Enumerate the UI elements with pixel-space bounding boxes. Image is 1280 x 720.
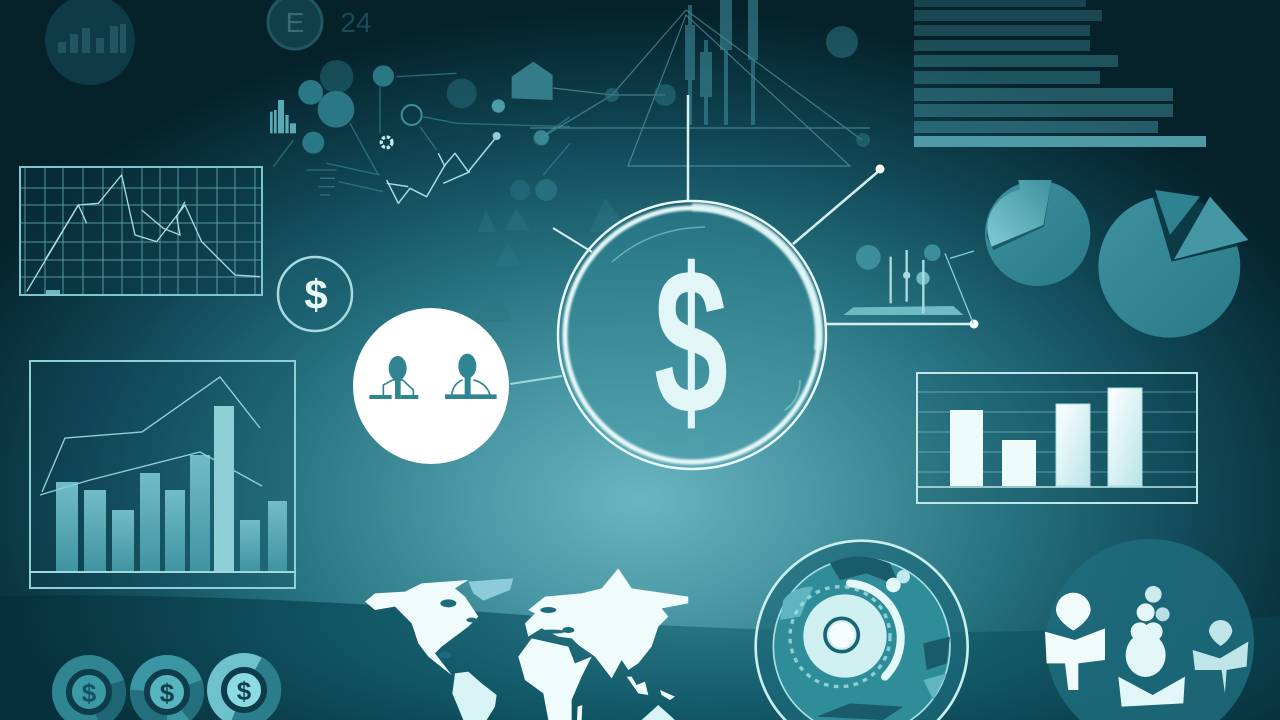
pie chart small xyxy=(985,180,1090,286)
icon: faint coin badge: E xyxy=(286,7,304,38)
coin 1 xyxy=(52,655,126,720)
small candlestick triangle chart xyxy=(843,244,974,323)
faint envelope xyxy=(512,62,553,100)
coin 1: $ xyxy=(82,678,97,708)
horizontal bars: top right xyxy=(914,0,1206,147)
icon: person right xyxy=(445,354,497,399)
white bar chart right xyxy=(917,373,1197,503)
jagged line xyxy=(387,137,497,203)
connector end points xyxy=(876,164,978,328)
faint far nodes xyxy=(533,26,870,201)
bar chart left xyxy=(30,361,295,588)
coins bottom left xyxy=(52,653,281,720)
globe target xyxy=(756,541,968,720)
icon: faint bar badge xyxy=(45,0,135,85)
icon: figure right xyxy=(1193,620,1248,693)
line chart panel xyxy=(20,167,262,295)
people badge bottom right xyxy=(1045,539,1254,720)
map: continents xyxy=(365,568,688,720)
faint network and jagged line xyxy=(270,60,570,203)
icon: figure left xyxy=(1045,593,1105,690)
grid lines xyxy=(20,167,262,295)
connector lines to main coin xyxy=(510,95,974,384)
chart lines xyxy=(27,175,260,292)
coin 2 xyxy=(130,655,204,720)
faint large web xyxy=(530,10,870,166)
faint top decoration xyxy=(45,0,870,203)
coin 3 xyxy=(207,653,281,720)
coin 3: $ xyxy=(237,676,252,706)
icon: figure centre xyxy=(1118,586,1185,707)
bottom dark wave xyxy=(0,595,1280,720)
bars xyxy=(56,406,287,571)
pie chart large xyxy=(1098,187,1250,338)
icon: faint coin badge: 24 xyxy=(340,7,372,38)
coin icon small: $ xyxy=(304,271,328,318)
map: greenland xyxy=(468,578,513,601)
main dollar coin: $ xyxy=(654,225,728,457)
main dollar coin xyxy=(558,201,826,469)
trend lines xyxy=(42,377,260,492)
map: lakes xyxy=(438,599,574,658)
faint triangles mid xyxy=(474,198,630,322)
candlesticks top xyxy=(685,0,758,125)
icon: person left xyxy=(369,356,418,399)
coin 2: $ xyxy=(160,678,175,708)
people circle xyxy=(353,308,509,464)
icon: faint coin badge xyxy=(268,0,372,49)
world map xyxy=(365,568,688,720)
faint mini bars xyxy=(270,100,296,133)
coin icon small xyxy=(278,257,352,331)
